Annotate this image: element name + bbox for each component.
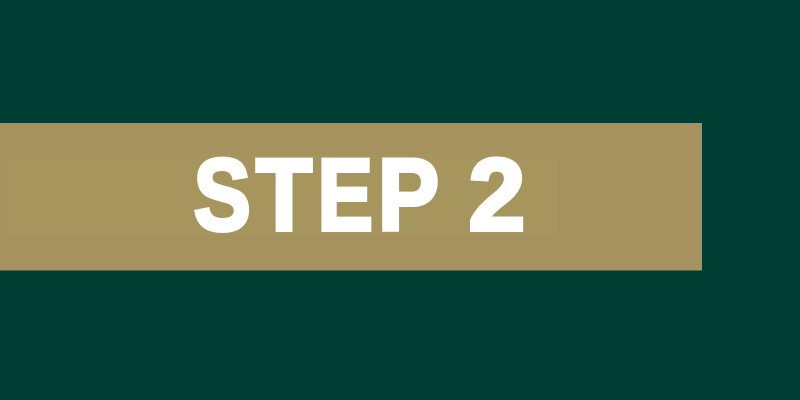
banner inner highlight: [8, 154, 558, 235]
heading: STEP 2: P: [378, 137, 439, 252]
heading: STEP 2: E: [318, 138, 373, 252]
gold banner: [0, 123, 702, 270]
heading: STEP 2: 2: [468, 138, 525, 252]
heading: STEP 2: [194, 137, 525, 252]
heading: STEP 2: S: [194, 138, 251, 252]
heading: STEP 2: T: [256, 137, 312, 252]
